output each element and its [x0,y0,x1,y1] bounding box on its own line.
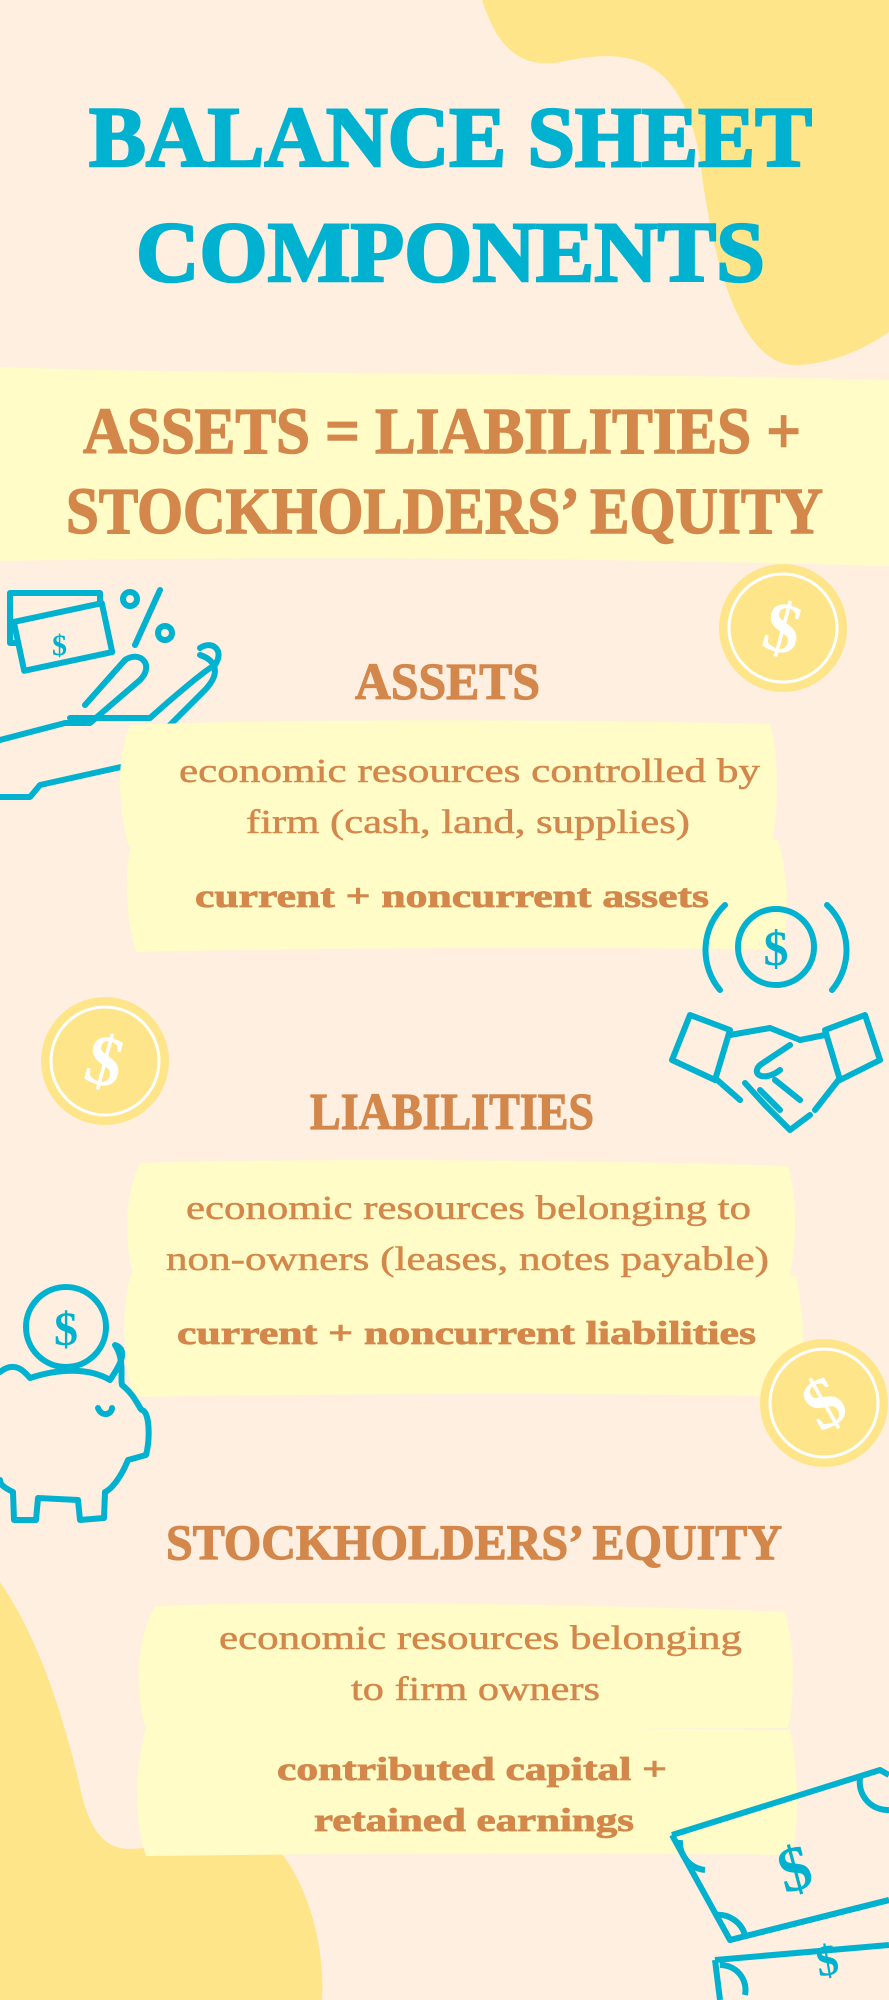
panel: assets [120,720,787,952]
panel: stockholders' equity: retained earnings [314,1803,634,1839]
coin 3 [760,1339,888,1467]
heading: assets: ASSETS [355,654,540,711]
title: COMPONENTS [136,204,765,300]
blob: bottom left [0,1582,322,2000]
coin 1 [719,564,847,692]
panel: assets: current + noncurrent assets [195,879,709,915]
panel: liabilities: non-owners (leases, notes payable) [166,1241,769,1278]
icon: banknotes [672,1770,889,2000]
icon: handshake with dollar [672,905,880,1130]
coin 2 [41,997,169,1125]
blob: top right [482,0,889,365]
panel: stockholders' equity [137,1603,797,1856]
panel: stockholders' equity: to firm owners [351,1671,600,1708]
icon: hand with money [0,590,219,797]
panel: assets: economic resources controlled by [179,753,760,790]
equation band: ASSETS = LIABILITIES + [83,395,801,468]
coin 1: $ [755,585,811,671]
equation band: STOCKHOLDERS’ EQUITY [66,475,823,548]
icon: banknotes: $ [770,1830,819,1907]
equation band [0,367,889,566]
panel: liabilities: economic resources belonging to [186,1190,751,1227]
icon: piggy bank: $ [54,1303,78,1356]
coin 3: $ [788,1359,860,1447]
panel: liabilities [124,1160,803,1397]
icon: banknotes: $ [812,1935,842,1987]
heading: liabilities: LIABILITIES [310,1084,594,1141]
title [89,89,812,300]
icon: handshake with dollar: $ [764,920,788,976]
panel: stockholders' equity: contributed capital + [277,1752,667,1788]
icon: hand with money: $ [52,629,67,662]
panel: liabilities: current + noncurrent liabilities [177,1316,756,1352]
heading: stockholders' equity: STOCKHOLDERS’ EQUITY [166,1514,782,1570]
coin 2: $ [77,1018,133,1104]
icon: piggy bank [0,1287,149,1520]
panel: assets: firm (cash, land, supplies) [246,804,690,841]
panel: stockholders' equity: economic resources belonging [219,1620,742,1657]
title: BALANCE SHEET [89,89,812,185]
